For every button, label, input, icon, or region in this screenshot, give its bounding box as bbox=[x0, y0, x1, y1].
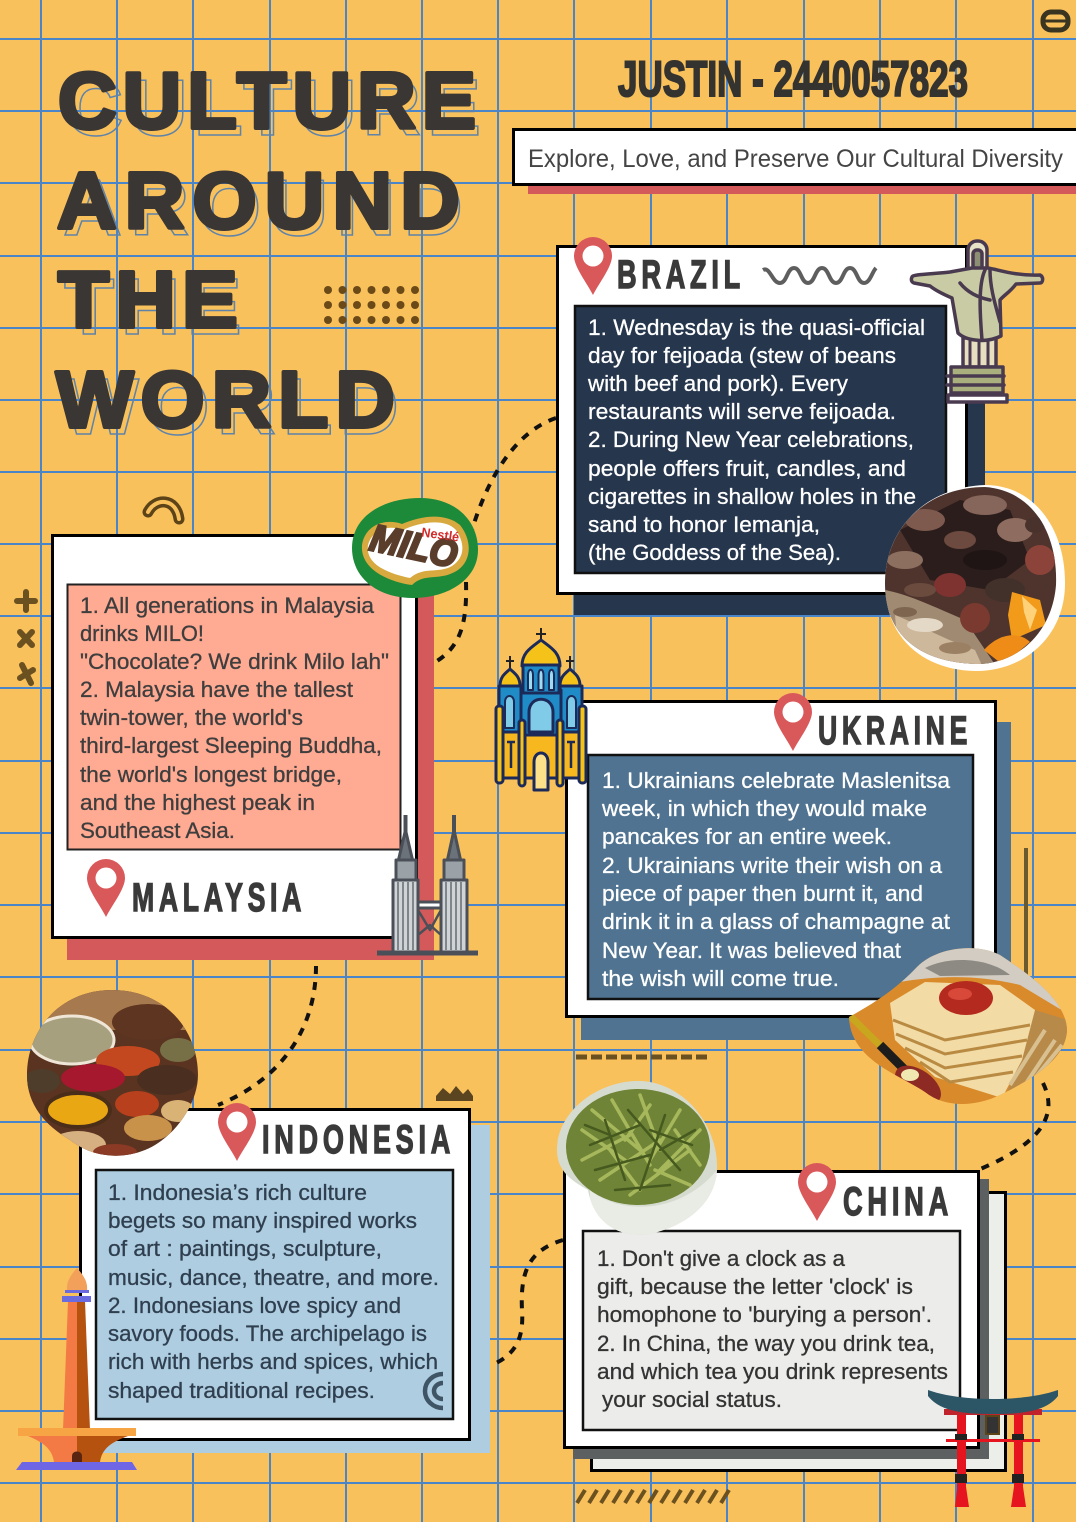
text block: China bbox=[583, 1231, 960, 1430]
decorative dashes below Ukraine bbox=[576, 1054, 708, 1060]
text block: Ukraine bbox=[588, 755, 973, 999]
icon: Malaysia pin bbox=[87, 859, 125, 917]
icon: Ukraine pin bbox=[774, 693, 812, 751]
panel: Indonesia bbox=[80, 1103, 490, 1453]
text block: Indonesia bbox=[96, 1170, 453, 1419]
text block: Indonesia: rich with herbs and spices, which bbox=[108, 1349, 438, 1374]
text block: Malaysia: Southeast Asia. bbox=[80, 818, 235, 843]
text block: China: 2. In China, the way you drink tea, bbox=[597, 1331, 935, 1356]
icon: Christ the Redeemer statue bbox=[911, 241, 1043, 402]
text block: Malaysia: and the highest peak in bbox=[80, 790, 315, 815]
text block: Malaysia: third-largest Sleeping Buddha, bbox=[80, 733, 382, 758]
icon: Ukrainian cathedral bbox=[496, 628, 586, 790]
text block: Malaysia: twin-tower, the world's bbox=[80, 705, 303, 730]
icon: Milo logo: MILO bbox=[366, 517, 461, 577]
subtitle banner bbox=[514, 130, 1076, 194]
icon: Brazil pin bbox=[574, 237, 612, 295]
text block: Indonesia: savory foods. The archipelago is bbox=[108, 1321, 427, 1346]
text block: Ukraine: week, in which they would make bbox=[601, 796, 927, 821]
text block: Indonesia: music, dance, theatre, and more. bbox=[108, 1265, 439, 1290]
text block: Brazil: cigarettes in shallow holes in the bbox=[588, 484, 916, 509]
photo: feijoada bbox=[880, 480, 1065, 672]
icon: arc squiggle bbox=[148, 502, 179, 519]
text block: Ukraine: 2. Ukrainians write their wish on a bbox=[602, 853, 943, 878]
text block: China: and which tea you drink represents bbox=[597, 1359, 948, 1384]
icon: Monas monument bbox=[16, 1268, 137, 1470]
title: WORLD bbox=[56, 355, 402, 444]
panel: Brazil bbox=[558, 237, 985, 615]
icon: China pin bbox=[798, 1163, 836, 1221]
text block: Indonesia: of art : paintings, sculpture, bbox=[108, 1236, 382, 1261]
text block: Ukraine: New Year. It was believed that bbox=[602, 938, 901, 963]
icon: crescent mark bbox=[425, 1374, 443, 1408]
text block: Brazil bbox=[575, 306, 946, 573]
text block: Ukraine: 1. Ukrainians celebrate Maslenitsa bbox=[602, 768, 951, 793]
connector: Ukraine to China bbox=[978, 1083, 1048, 1170]
text block: Malaysia: 2. Malaysia have the tallest bbox=[80, 677, 353, 702]
text block: Malaysia: the world's longest bridge, bbox=[80, 762, 342, 787]
icon: Petronas towers bbox=[377, 815, 478, 953]
icon: Milo logo bbox=[352, 498, 478, 598]
icon: top right ring bbox=[1043, 12, 1068, 30]
text block: Brazil: 2. During New Year celebrations, bbox=[588, 427, 914, 452]
text block: Malaysia: "Chocolate? We drink Milo lah" bbox=[80, 649, 389, 674]
heading: Ukraine: UKRAINE bbox=[818, 709, 972, 753]
heading: Indonesia: INDONESIA bbox=[262, 1118, 455, 1162]
title: AROUND bbox=[57, 156, 468, 245]
photo: green tea bowl bbox=[557, 1081, 717, 1235]
text block: Ukraine: the wish will come true. bbox=[602, 966, 839, 991]
icon: torii gate bbox=[928, 1390, 1058, 1507]
title: CULTURE bbox=[65, 63, 487, 152]
subtitle banner: Explore, Love, and Preserve Our Cultural Diversity bbox=[528, 145, 1063, 173]
decorative mountains bbox=[436, 1086, 473, 1101]
text block: Brazil: people offers fruit, candles, and bbox=[588, 456, 906, 481]
panel: China bbox=[564, 1163, 1006, 1470]
text block: Brazil: (the Goddess of the Sea). bbox=[588, 540, 841, 565]
text block: China: homophone to 'burying a person'. bbox=[597, 1302, 932, 1327]
icon: plus, cross and star marks bbox=[17, 592, 35, 683]
photo: spices bbox=[27, 990, 198, 1156]
dot pattern bbox=[324, 286, 419, 324]
panel: Ukraine bbox=[566, 693, 1011, 1040]
title: AROUND bbox=[63, 163, 471, 252]
photo: pancakes with caviar bbox=[849, 948, 1067, 1104]
heading: China: CHINA bbox=[843, 1180, 953, 1224]
connector: Malaysia to Indonesia bbox=[218, 966, 316, 1105]
heading: Malaysia: MALAYSIA bbox=[132, 876, 306, 920]
text block: China: 1. Don't give a clock as a bbox=[597, 1246, 846, 1271]
text block: Malaysia bbox=[68, 584, 400, 850]
text block: Malaysia: drinks MILO! bbox=[80, 621, 204, 646]
text block: Indonesia: 2. Indonesians love spicy and bbox=[108, 1293, 401, 1318]
text block: Brazil: sand to honor Iemanja, bbox=[588, 512, 820, 537]
text block: Indonesia: begets so many inspired works bbox=[108, 1208, 417, 1233]
decorative vertical line bbox=[1024, 848, 1028, 1005]
title: WORLD bbox=[62, 362, 406, 451]
title: THE bbox=[64, 262, 248, 351]
panel: Malaysia bbox=[52, 536, 434, 960]
text block: China: your social status. bbox=[602, 1387, 782, 1412]
text block: Ukraine: drink it in a glass of champagne at bbox=[602, 909, 950, 934]
text block: Ukraine: piece of paper then burnt it, and bbox=[602, 881, 923, 906]
connector: Indonesia to China bbox=[490, 1240, 563, 1366]
heading: Brazil: BRAZIL bbox=[617, 253, 745, 297]
text block: Brazil: 1. Wednesday is the quasi-official bbox=[588, 315, 925, 340]
connector: Milo to Malaysia panel bbox=[437, 582, 466, 661]
text block: Indonesia: shaped traditional recipes. bbox=[108, 1378, 375, 1403]
icon: Milo logo: Nestlé bbox=[420, 524, 460, 545]
text block: Ukraine: pancakes for an entire week. bbox=[602, 824, 892, 849]
connector: Brazil to Malaysia bbox=[472, 418, 556, 530]
decorative hatch bbox=[577, 1490, 729, 1503]
text block: Brazil: restaurants will serve feijoada. bbox=[588, 399, 896, 424]
title bbox=[56, 56, 487, 451]
text block: Brazil: day for feijoada (stew of beans bbox=[588, 343, 896, 368]
icon: Indonesia pin bbox=[218, 1103, 256, 1161]
wave decoration bbox=[763, 268, 876, 283]
title: CULTURE bbox=[58, 56, 482, 145]
text block: Indonesia: 1. Indonesia’s rich culture bbox=[108, 1180, 367, 1205]
text block: China: gift, because the letter 'clock' is bbox=[597, 1274, 913, 1299]
text block: Brazil: with beef and pork). Every bbox=[587, 371, 848, 396]
text block: Malaysia: 1. All generations in Malaysia bbox=[80, 593, 375, 618]
title: THE bbox=[58, 255, 244, 344]
